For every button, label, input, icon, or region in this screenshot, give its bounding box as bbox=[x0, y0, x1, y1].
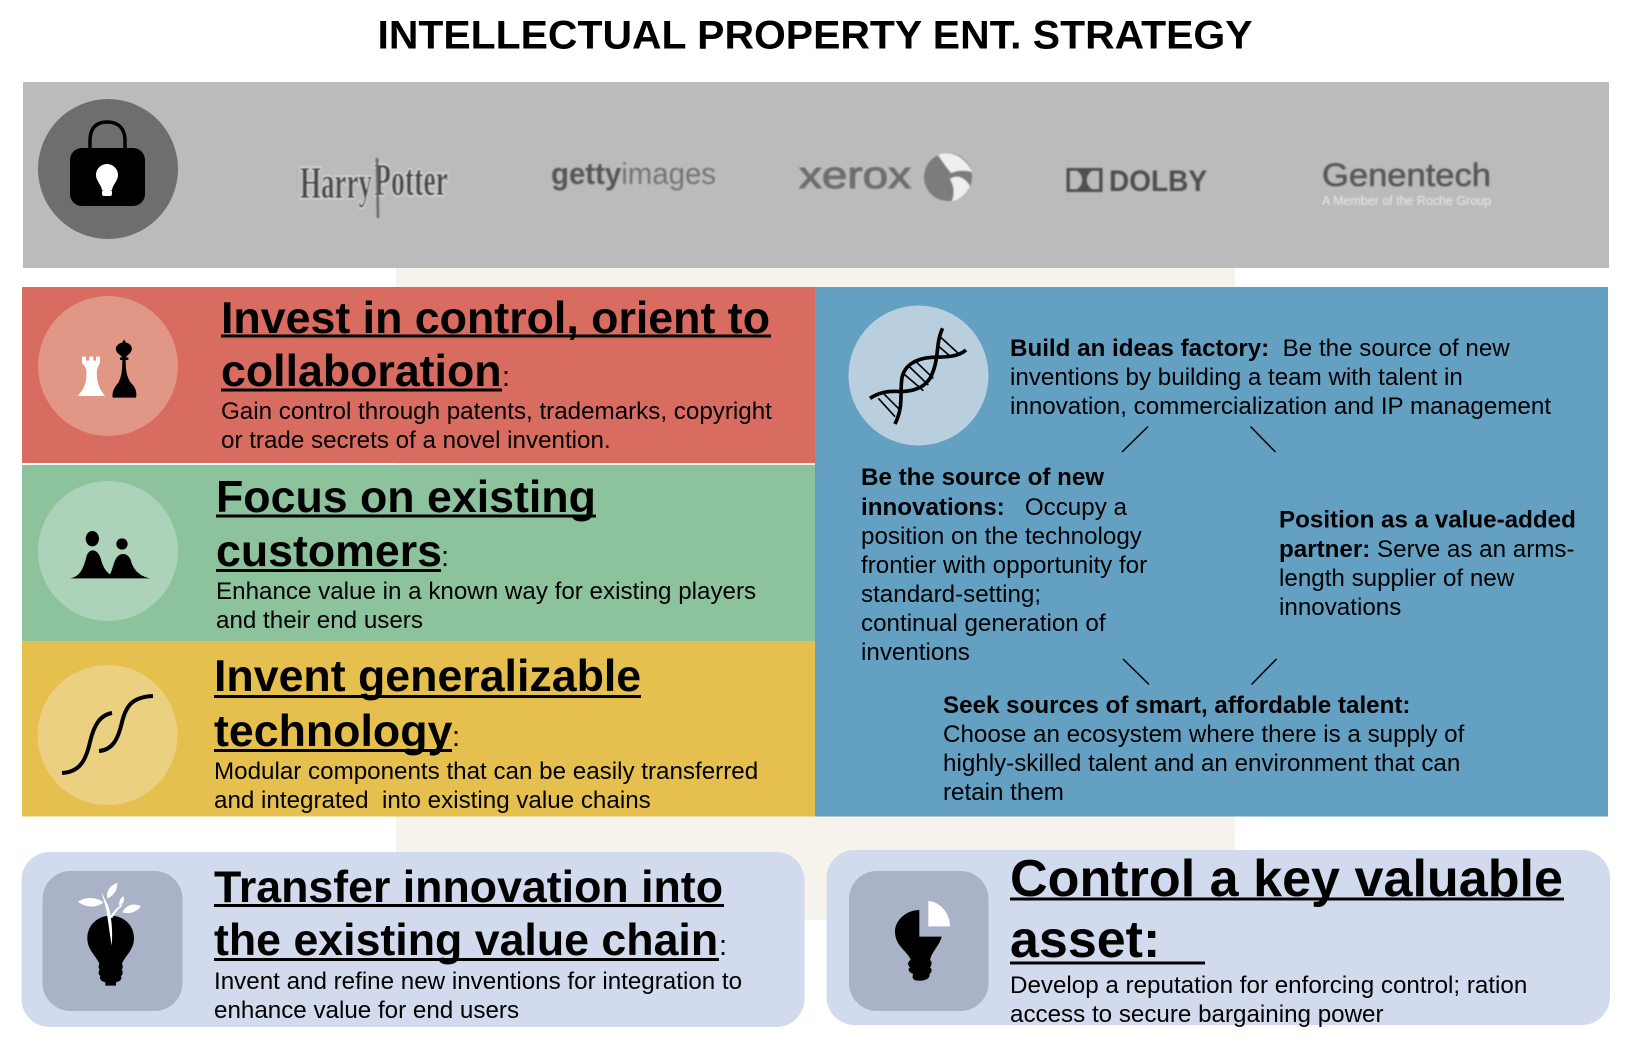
logo: Harry Potter bbox=[300, 154, 448, 218]
logo: Harry Potter: Harry bbox=[300, 157, 372, 208]
logo: Xerox: xerox bbox=[799, 155, 911, 197]
text: position as a value-added partner: innovations bbox=[1279, 594, 1401, 621]
connector: bottom right bbox=[1252, 659, 1276, 684]
text: focus description: and their end users bbox=[216, 607, 423, 634]
text: transfer description: enhance value for end users bbox=[214, 997, 519, 1024]
text: transfer description bbox=[214, 968, 742, 1024]
text: seek sources of smart talent: highly-skilled talent and an environment that can bbox=[943, 750, 1460, 777]
text: position as a value-added partner bbox=[1279, 506, 1576, 621]
heading: transfer innovation: the existing value chain bbox=[214, 916, 718, 965]
icon: bulb with sprout bbox=[42, 871, 182, 1011]
panel: invent generalizable technology bbox=[22, 641, 815, 816]
heading: invest in control bbox=[221, 294, 771, 396]
heading: transfer innovation bbox=[214, 863, 727, 965]
title: INTELLECTUAL PROPERTY ENT. STRATEGY bbox=[378, 14, 1253, 58]
heading: invest in control: collaboration bbox=[221, 347, 502, 396]
heading: invent generalizable technology: technology bbox=[214, 707, 452, 756]
text: control description: Develop a reputation for enforcing control; ration bbox=[1010, 972, 1527, 999]
heading: control a key valuable asset: Control a key valuable bbox=[1010, 850, 1563, 908]
heading: control a key valuable asset bbox=[1010, 850, 1564, 969]
text: be the source of new innovations bbox=[861, 464, 1147, 666]
text: transfer description: Invent and refine new inventions for integration to bbox=[214, 968, 742, 995]
panel: invest in control bbox=[22, 287, 815, 463]
heading: transfer innovation: Transfer innovation into bbox=[214, 863, 723, 912]
text: focus description bbox=[216, 578, 756, 634]
text: invent description: Modular components that can be easily transferred bbox=[214, 758, 758, 785]
text: invest in control description: or trade secrets of a novel invention. bbox=[221, 427, 611, 454]
text: build an ideas factory: Build an ideas factory: Be the source of new bbox=[1010, 335, 1510, 362]
panel: logo band bbox=[23, 82, 1609, 268]
logo: Dolby: DOLBY bbox=[1109, 165, 1207, 198]
text: seek sources of smart talent: retain them bbox=[943, 779, 1064, 806]
text: position as a value-added partner: partner: Serve as an arms- bbox=[1279, 536, 1575, 563]
icon: dna bbox=[848, 306, 988, 446]
text: build an ideas factory bbox=[1010, 335, 1551, 420]
heading: transfer innovation: : bbox=[719, 930, 727, 962]
text: seek sources of smart talent: Choose an ecosystem where there is a supply of bbox=[943, 721, 1465, 748]
heading: focus on existing customers: Focus on existing bbox=[216, 473, 596, 522]
background panel: cream bbox=[396, 268, 1235, 920]
logo: Getty Images: gettyimages bbox=[551, 156, 716, 191]
panel: focus on existing customers bbox=[22, 465, 815, 641]
panel: control a key asset bbox=[826, 850, 1610, 1028]
text: be the source of new innovations: continual generation of bbox=[861, 610, 1106, 637]
icon: people bbox=[38, 481, 178, 621]
text: invest in control description: Gain control through patents, trademarks, copyright bbox=[221, 398, 772, 425]
text: build an ideas factory: innovation, commercialization and IP management bbox=[1010, 393, 1551, 420]
heading: invest in control: Invest in control, orient to bbox=[221, 294, 770, 343]
text: be the source of new innovations: frontier with opportunity for bbox=[861, 552, 1147, 579]
text: focus description: Enhance value in a known way for existing players bbox=[216, 578, 756, 605]
text: be the source of new innovations: position on the technology bbox=[861, 523, 1143, 550]
icon: bulb with pie slice bbox=[849, 871, 988, 1011]
text: invent description bbox=[214, 758, 758, 814]
panel: ideas cycle bbox=[815, 287, 1608, 816]
heading: control a key valuable asset: asset: bbox=[1010, 911, 1160, 969]
text: seek sources of smart talent bbox=[943, 692, 1465, 806]
logo: Genentech: A Member of the Roche Group bbox=[1322, 193, 1491, 208]
heading: invent generalizable technology bbox=[214, 652, 641, 756]
text: be the source of new innovations: Be the source of new bbox=[861, 464, 1104, 491]
text: invest in control description bbox=[221, 398, 772, 454]
logo: Harry Potter: Potter bbox=[374, 154, 448, 205]
connector: top left bbox=[1122, 426, 1148, 452]
text: position as a value-added partner: Position as a value-added bbox=[1279, 506, 1576, 534]
text: control description: access to secure bargaining power bbox=[1010, 1001, 1384, 1028]
logo: Genentech bbox=[1322, 157, 1491, 208]
heading: focus on existing customers: customers bbox=[216, 527, 442, 576]
heading: focus on existing customers bbox=[216, 473, 596, 576]
connector: bottom left bbox=[1123, 659, 1149, 684]
text: position as a value-added partner: length supplier of new bbox=[1279, 565, 1515, 592]
panel: transfer innovation bbox=[22, 852, 804, 1027]
icon: chess pieces bbox=[38, 296, 178, 436]
text: seek sources of smart talent: Seek sources of smart, affordable talent: bbox=[943, 692, 1410, 719]
heading: invent generalizable technology: : bbox=[452, 721, 460, 753]
icon: s-curves bbox=[38, 665, 178, 805]
text: invent description: and integrated into existing value chains bbox=[214, 787, 651, 814]
logo: Genentech: Genentech bbox=[1322, 157, 1491, 193]
logo: Dolby bbox=[1066, 165, 1207, 198]
logo: Xerox bbox=[799, 153, 972, 201]
text: be the source of new innovations: standard-setting; bbox=[861, 581, 1041, 608]
text: be the source of new innovations: inventions bbox=[861, 639, 970, 666]
icon: padlock with bulb bbox=[38, 99, 178, 239]
heading: invent generalizable technology: Invent generalizable bbox=[214, 652, 641, 701]
text: build an ideas factory: inventions by building a team with talent in bbox=[1010, 364, 1463, 391]
connector: top right bbox=[1250, 426, 1276, 452]
heading: invest in control: : bbox=[502, 361, 510, 393]
heading: focus on existing customers: : bbox=[441, 541, 449, 573]
text: be the source of new innovations: innovations: Occupy a bbox=[861, 494, 1127, 521]
text: control description bbox=[1010, 972, 1527, 1028]
